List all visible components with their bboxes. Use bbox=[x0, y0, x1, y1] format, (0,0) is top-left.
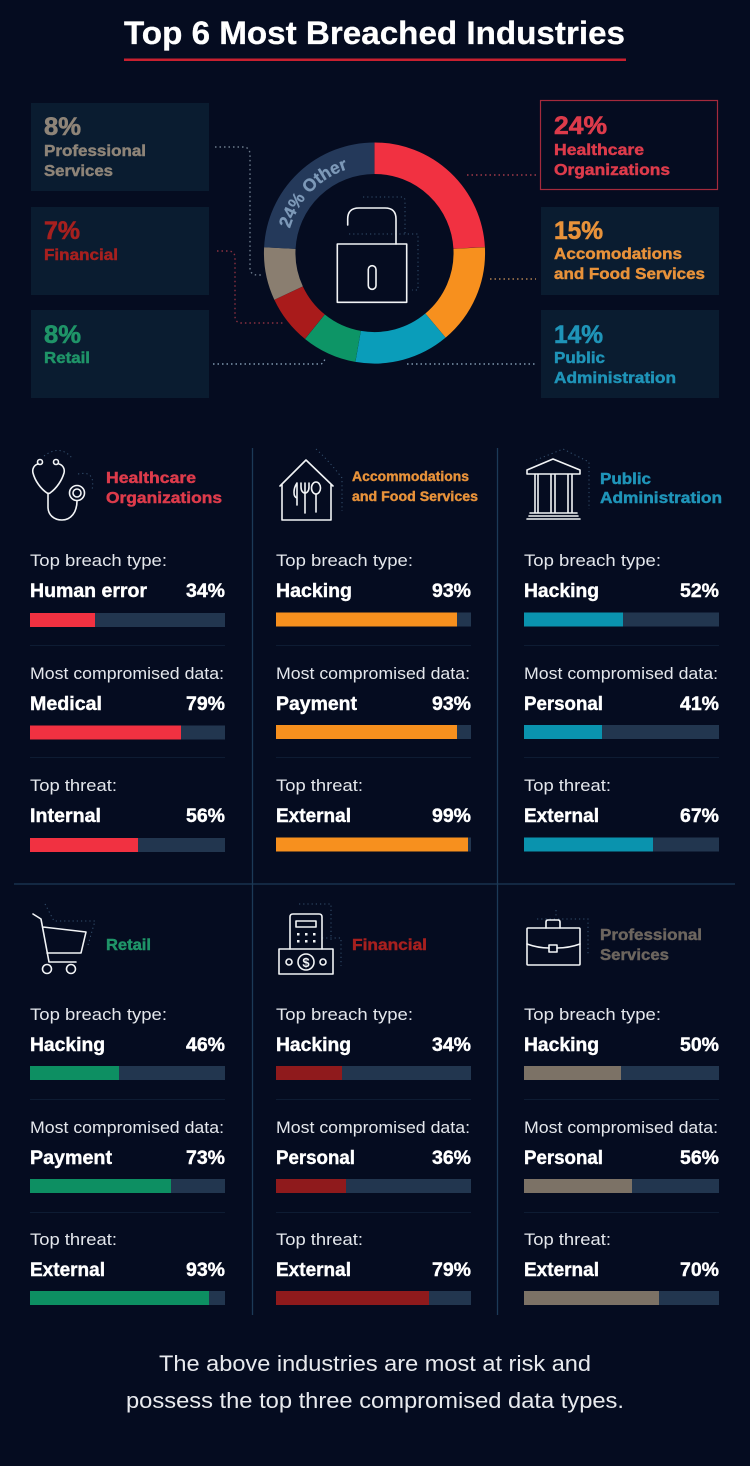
callout: accommodations and food services 15%: and Food Services bbox=[554, 266, 705, 283]
metric: most compromised data: 56% bbox=[680, 1147, 719, 1169]
metric: most compromised data: 93% bbox=[432, 693, 471, 715]
metric: top breach type: Top breach type: bbox=[524, 551, 661, 570]
metric: most compromised data bbox=[276, 1118, 471, 1193]
metric: top threat: 93% bbox=[186, 1259, 225, 1281]
callout: healthcare organizations 24% bbox=[540, 100, 718, 190]
callout: public administration 14%: Administration bbox=[554, 370, 676, 387]
callout: retail 8% bbox=[31, 310, 209, 398]
icon: shopping cart bbox=[33, 904, 95, 974]
callout: public administration 14%: 14% bbox=[554, 321, 603, 349]
metric: top threat: 70% bbox=[680, 1259, 719, 1281]
metric: top breach type: Hacking bbox=[276, 581, 352, 602]
metric: top breach type: 93% bbox=[432, 580, 471, 602]
callout: retail 8%: 8% bbox=[44, 321, 81, 349]
icon: cash register bbox=[279, 904, 342, 974]
metric: top threat bbox=[276, 1230, 471, 1305]
heading: professional services bbox=[600, 927, 702, 964]
callout: financial 7%: Financial bbox=[44, 247, 118, 264]
metric: most compromised data: Most compromised data: bbox=[276, 664, 470, 683]
metric: most compromised data: Most compromised data: bbox=[30, 664, 224, 683]
metric: most compromised data: Payment bbox=[276, 694, 358, 715]
metric: top threat bbox=[30, 776, 225, 852]
heading: public administration: Public bbox=[600, 471, 651, 488]
metric: most compromised data: 41% bbox=[680, 693, 719, 715]
heading: public administration bbox=[600, 471, 722, 507]
metric: most compromised data: Most compromised data: bbox=[30, 1118, 224, 1137]
metric: top breach type: Top breach type: bbox=[276, 551, 413, 570]
icon: briefcase bbox=[527, 910, 588, 965]
callout: professional services 8%: 8% bbox=[44, 113, 81, 141]
metric: top breach type bbox=[276, 551, 471, 626]
metric: top threat: 99% bbox=[432, 805, 471, 827]
icon: government building bbox=[527, 449, 589, 519]
callout: professional services 8%: Professional bbox=[44, 143, 146, 160]
panel: share of breaches overview bbox=[31, 100, 719, 398]
callout: healthcare organizations 24%: Healthcare bbox=[554, 142, 644, 159]
metric: top threat: Top threat: bbox=[30, 1230, 117, 1249]
footer text bbox=[126, 1351, 624, 1413]
metric: most compromised data: 36% bbox=[432, 1147, 471, 1169]
metric: most compromised data: Most compromised data: bbox=[524, 664, 718, 683]
metric: top breach type: Top breach type: bbox=[30, 1005, 167, 1024]
footer text: The above industries are most at risk and bbox=[159, 1351, 591, 1376]
metric: top threat bbox=[524, 776, 719, 852]
panel: professional services bbox=[524, 910, 719, 1305]
metric: top breach type: 46% bbox=[186, 1034, 225, 1056]
callout: accommodations and food services 15% bbox=[541, 207, 719, 295]
callout: financial 7%: 7% bbox=[44, 217, 80, 245]
metric: top breach type: Top breach type: bbox=[30, 551, 167, 570]
metric: top threat bbox=[524, 1230, 719, 1305]
metric: top threat: Top threat: bbox=[524, 1230, 611, 1249]
heading: accommodations and food services: and Food Services bbox=[352, 488, 478, 504]
icon: cash register: $ bbox=[302, 955, 310, 970]
metric: top threat: 79% bbox=[432, 1259, 471, 1281]
metric: most compromised data: 79% bbox=[186, 693, 225, 715]
metric: top breach type: Top breach type: bbox=[276, 1005, 413, 1024]
heading: public administration: Administration bbox=[600, 490, 722, 507]
callout: public administration 14% bbox=[541, 310, 719, 398]
callout: healthcare organizations 24%: Organizations bbox=[554, 162, 670, 179]
callout: professional services 8%: Services bbox=[44, 163, 113, 180]
metric: most compromised data bbox=[524, 664, 719, 739]
metric: top threat bbox=[276, 776, 471, 852]
heading: accommodations and food services bbox=[352, 468, 478, 504]
heading: healthcare organizations bbox=[106, 470, 222, 507]
metric: top threat: Top threat: bbox=[524, 776, 611, 795]
metric: most compromised data: Most compromised data: bbox=[276, 1118, 470, 1137]
callout: professional services 8% bbox=[31, 103, 209, 191]
metric: top breach type bbox=[30, 1005, 225, 1080]
icon: house with cutlery bbox=[280, 449, 342, 520]
metric: top threat: External bbox=[524, 806, 599, 827]
metric: top threat: Top threat: bbox=[276, 1230, 363, 1249]
metric: most compromised data: Most compromised data: bbox=[524, 1118, 718, 1137]
metric: most compromised data bbox=[524, 1118, 719, 1193]
metric: top breach type bbox=[524, 1005, 719, 1080]
footer text: possess the top three compromised data types. bbox=[126, 1388, 624, 1413]
metric: top threat: 56% bbox=[186, 805, 225, 827]
callout: healthcare organizations 24%: 24% bbox=[554, 112, 607, 140]
metric: most compromised data: Personal bbox=[524, 694, 603, 715]
title: Top 6 Most Breached Industries bbox=[124, 15, 625, 51]
grid lines bbox=[14, 448, 735, 1315]
metric: most compromised data: Personal bbox=[276, 1148, 355, 1169]
metric: top threat: Top threat: bbox=[276, 776, 363, 795]
metric: most compromised data: Medical bbox=[30, 694, 102, 715]
panel: public administration bbox=[524, 449, 722, 852]
metric: top threat: 67% bbox=[680, 805, 719, 827]
metric: top breach type bbox=[30, 551, 225, 627]
heading: accommodations and food services: Accommodations bbox=[352, 468, 469, 484]
metric: top breach type: Human error bbox=[30, 581, 148, 602]
metric: top threat: External bbox=[30, 1260, 105, 1281]
metric: top threat: External bbox=[524, 1260, 599, 1281]
metric: top threat: Top threat: bbox=[30, 776, 117, 795]
callout: retail 8%: Retail bbox=[44, 350, 90, 367]
metric: top threat: External bbox=[276, 1260, 351, 1281]
panel: accommodations and food services bbox=[276, 449, 478, 852]
metric: top breach type: Hacking bbox=[524, 1035, 599, 1056]
metric: top threat bbox=[30, 1230, 225, 1305]
metric: top breach type: 52% bbox=[680, 580, 719, 602]
metric: top threat: External bbox=[276, 806, 351, 827]
metric: top breach type: 34% bbox=[432, 1034, 471, 1056]
dotted connectors bbox=[213, 147, 536, 364]
metric: top breach type: Hacking bbox=[30, 1035, 105, 1056]
callout: accommodations and food services 15%: Accomodations bbox=[554, 246, 682, 263]
donut chart: 24% Other bbox=[279, 160, 346, 228]
heading: professional services: Services bbox=[600, 947, 669, 964]
metric: most compromised data: Payment bbox=[30, 1148, 113, 1169]
metric: top threat: Internal bbox=[30, 806, 101, 827]
heading: professional services: Professional bbox=[600, 927, 702, 944]
callout: accommodations and food services 15%: 15% bbox=[554, 217, 603, 245]
heading: retail: Retail bbox=[106, 937, 151, 954]
metric: top breach type bbox=[276, 1005, 471, 1080]
metric: most compromised data bbox=[30, 664, 225, 740]
metric: top breach type: Hacking bbox=[524, 581, 599, 602]
metric: top breach type: Hacking bbox=[276, 1035, 351, 1056]
metric: top breach type bbox=[524, 551, 719, 626]
callout: public administration 14%: Public bbox=[554, 350, 605, 367]
metric: most compromised data: Personal bbox=[524, 1148, 603, 1169]
metric: most compromised data bbox=[30, 1118, 225, 1193]
metric: most compromised data: 73% bbox=[186, 1147, 225, 1169]
metric: most compromised data bbox=[276, 664, 471, 739]
heading: healthcare organizations: Healthcare bbox=[106, 470, 196, 487]
panel: financial bbox=[276, 904, 471, 1305]
callout: financial 7% bbox=[31, 207, 209, 295]
donut chart bbox=[264, 142, 486, 364]
icon: padlock bbox=[337, 197, 418, 302]
metric: top breach type: 50% bbox=[680, 1034, 719, 1056]
heading: healthcare organizations: Organizations bbox=[106, 490, 222, 507]
metric: top breach type: Top breach type: bbox=[524, 1005, 661, 1024]
icon: stethoscope bbox=[33, 450, 93, 520]
panel: retail bbox=[30, 904, 225, 1305]
panel: healthcare organizations bbox=[30, 450, 225, 852]
metric: top breach type: 34% bbox=[186, 580, 225, 602]
heading: financial: Financial bbox=[352, 937, 427, 954]
